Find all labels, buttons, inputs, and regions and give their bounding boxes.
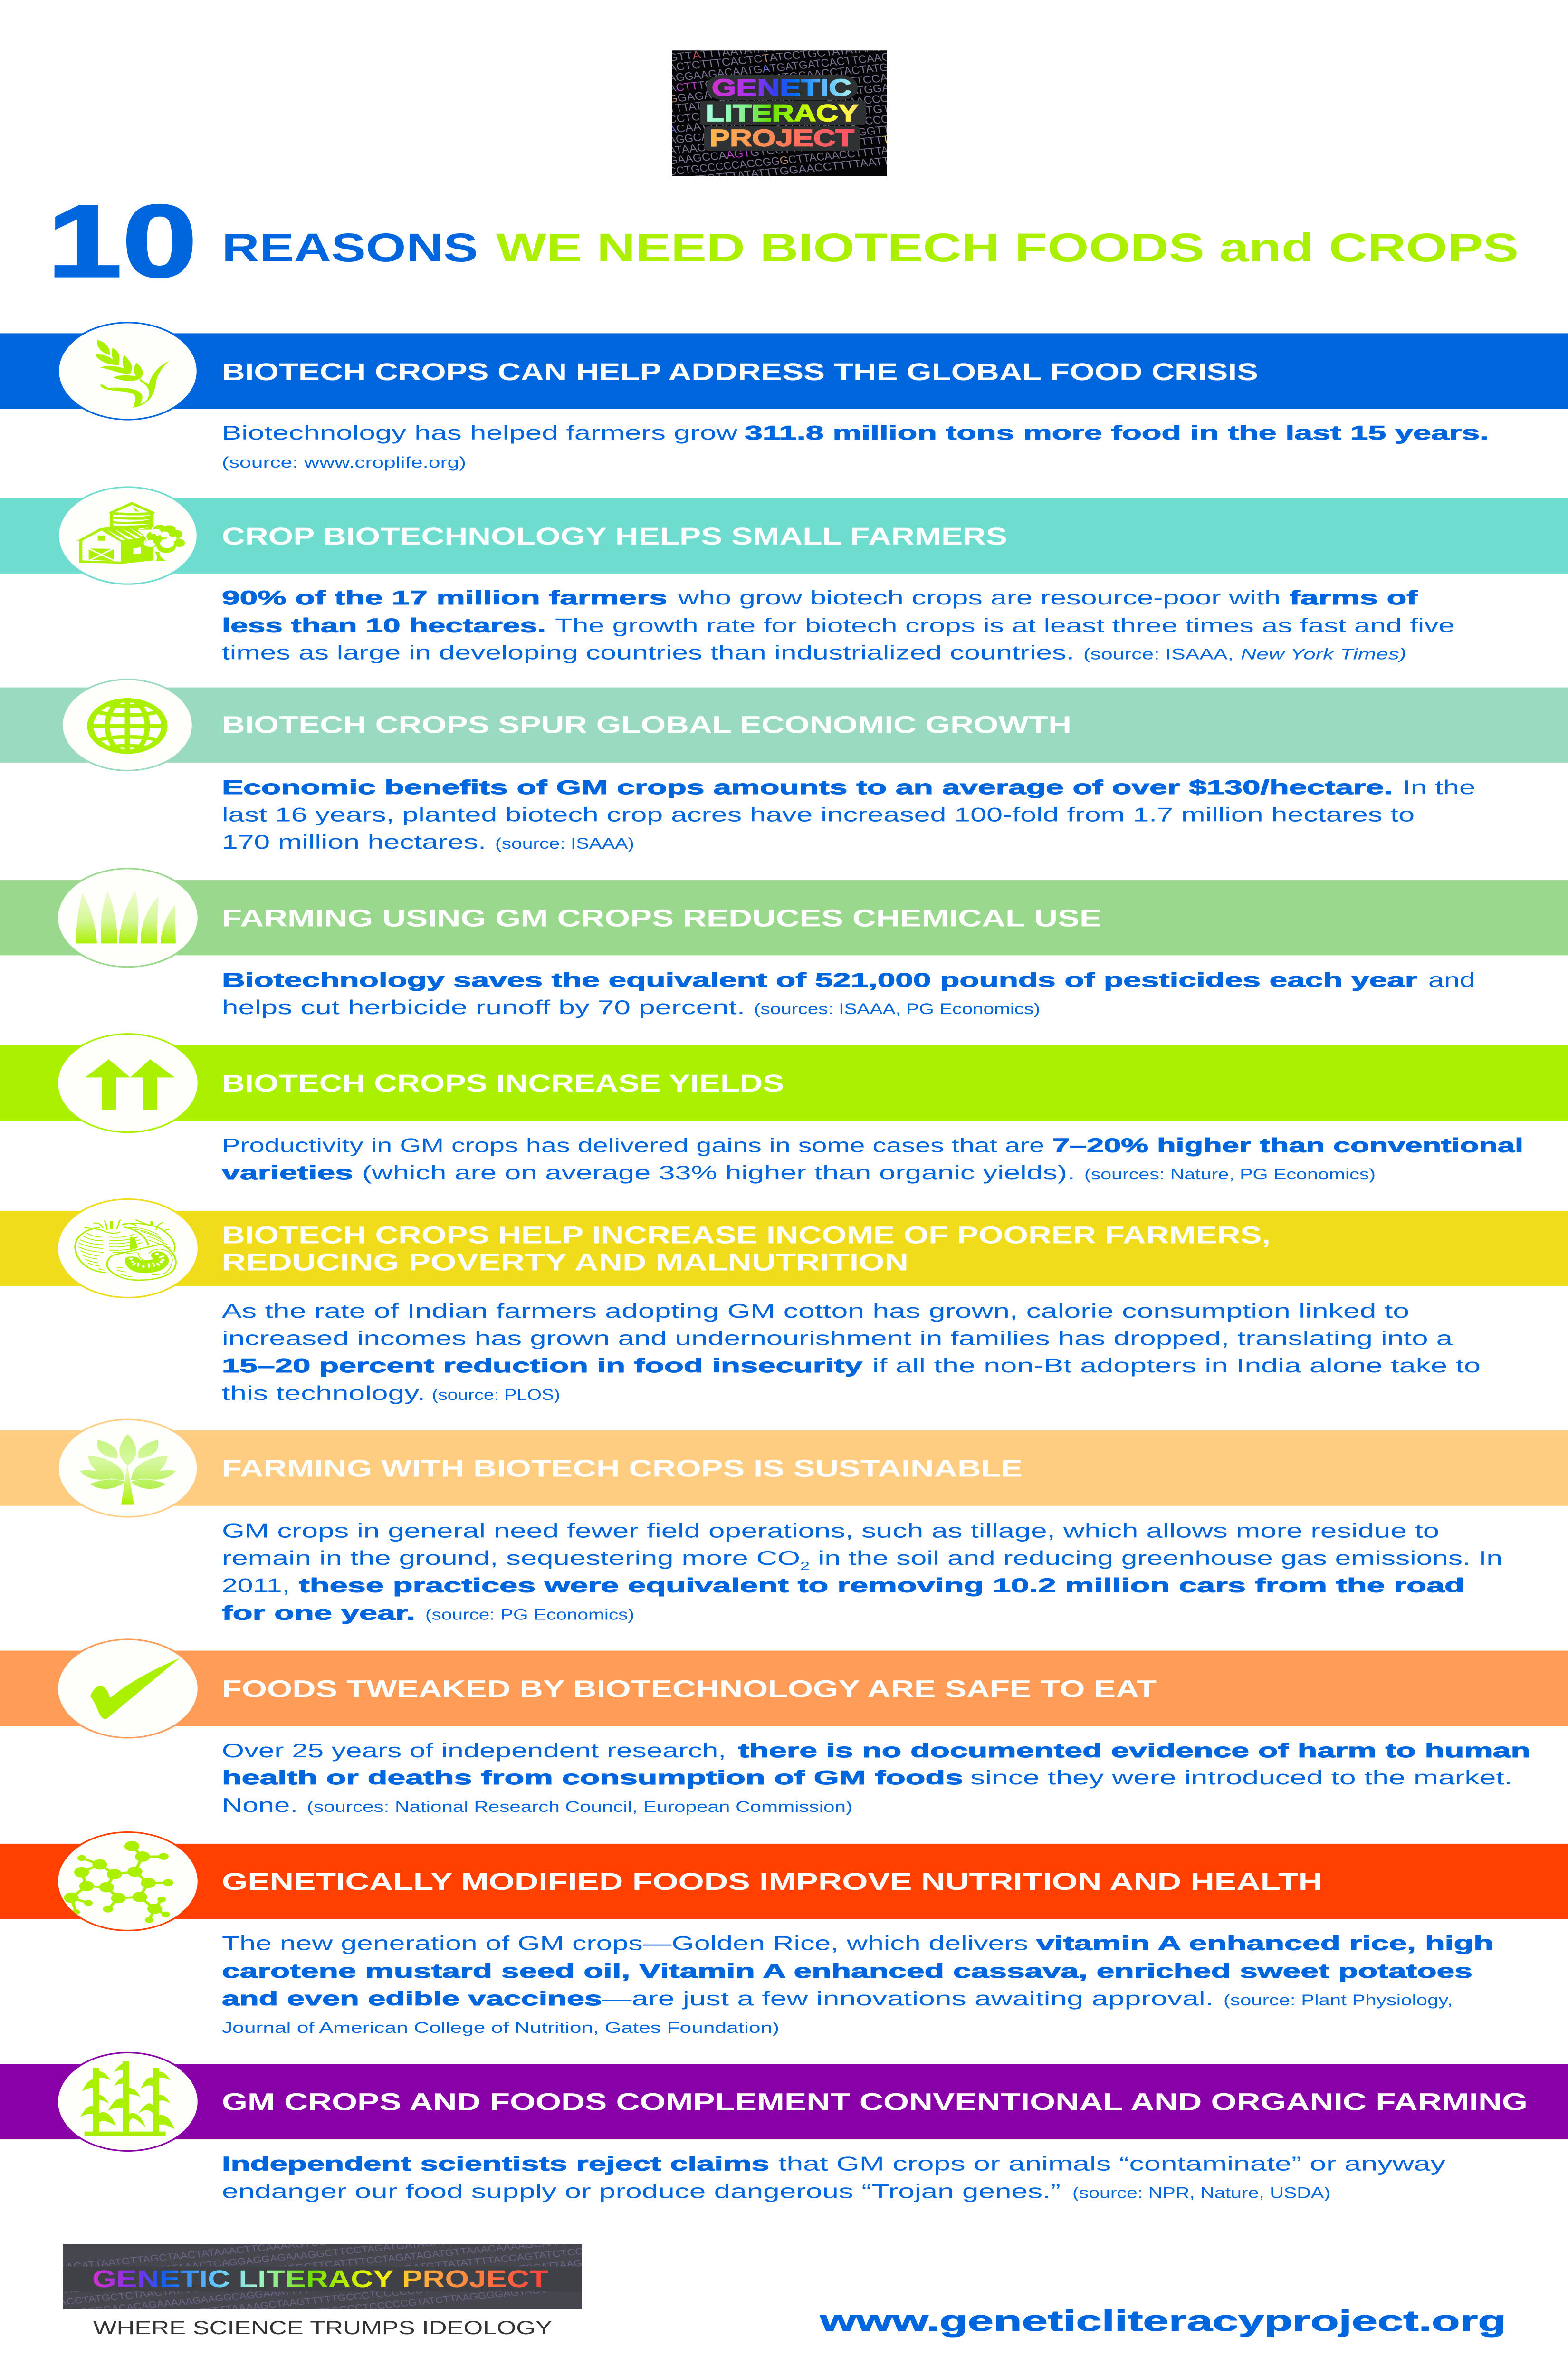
body text: vitamin A enhanced rice, high — [1036, 1932, 1493, 1954]
body text: in the soil and reducing greenhouse gas emissions. In — [818, 1547, 1502, 1569]
logo: Genetic Literacy Project: ACTCTTTCACTCTATCCTGCTATATAAGTA — [667, 39, 899, 74]
icon: grass — [57, 869, 199, 967]
body text — [222, 2152, 1445, 2203]
source — [1083, 646, 1406, 663]
icon: tomatoes — [57, 1199, 199, 1298]
body text: that GM crops or animals “contaminate” or anyway — [778, 2152, 1445, 2175]
body text — [222, 422, 1489, 444]
heading: BIOTECH CROPS HELP INCREASE INCOME OF POORER FARMERS, — [222, 1222, 1271, 1249]
body text: who grow biotech crops are resource-poor with — [678, 586, 1281, 609]
logo: Genetic Literacy Project: PROJECT — [709, 125, 854, 152]
icon: wheat — [58, 323, 198, 420]
body text: Biotechnology saves the equivalent of 521,000 pounds of pesticides each year — [222, 968, 1417, 991]
body text: Independent scientists reject claims — [222, 2152, 769, 2175]
body text: for one year. — [222, 1601, 415, 1624]
source: (source: ISAAA) — [495, 835, 634, 852]
panel: reason 10 — [0, 2052, 1568, 2203]
icon: tree — [58, 1419, 198, 1517]
source — [222, 1992, 1453, 2036]
footer logo banner: AACATTAATGTTAGCTAACTATAAACTTCAAAAGTCCTAGATTAAGGCTTAATGGCAATAACCTTGAAGCTAGGAT — [58, 2209, 615, 2273]
body text: if all the non-Bt adopters in India alone take to — [872, 1354, 1481, 1377]
body text: health or deaths from consumption of GM foods — [222, 1766, 963, 1789]
logo: Genetic Literacy Project: LITERACY — [706, 100, 859, 126]
body text: —are just a few innovations awaiting approval. — [602, 1987, 1214, 2010]
footer logo banner: TAGGCATACAGGAGGAGAAAGTTTAGGTTTATGCTTCATTTTCCTAGATAGATGTTAAACAAAAGCAAAGATTACC — [58, 2232, 615, 2296]
icon: molecule — [57, 1832, 199, 1930]
body text — [222, 1739, 1530, 1816]
footer logo banner: GENETIC LITERACY PROJECT — [92, 2265, 548, 2292]
body text: 2 — [800, 1560, 810, 1573]
banner — [0, 880, 1568, 955]
heading: CROP BIOTECHNOLOGY HELPS SMALL FARMERS — [222, 523, 1007, 550]
title: REASONS — [222, 225, 478, 270]
logo: Genetic Literacy Project: ACAATTGCATTAGCTTACGGCATTATGTT — [667, 102, 898, 136]
banner — [0, 1651, 1568, 1726]
body text: helps cut herbicide runoff by 70 percent. — [222, 996, 745, 1018]
body text: this technology. — [222, 1382, 425, 1404]
body text — [222, 1932, 1493, 2010]
heading: BIOTECH CROPS CAN HELP ADDRESS THE GLOBAL FOOD CRISIS — [222, 359, 1258, 385]
footer logo banner — [63, 2244, 582, 2309]
logo: Genetic Literacy Project: ACTTTCAGGATCACATGCAACCTACTATGG — [667, 60, 898, 95]
heading — [222, 1222, 1271, 1276]
body text: 170 million hectares. — [222, 831, 486, 853]
footer logo banner: ACCTATGCTCTAACTATAAAGGAGAGAAAGGCTTTTATCGTATGATAGATGTTATATTTTACCAGTATCTCCTTGG — [58, 2243, 615, 2308]
footer logo banner: TTCATCAGAAGGCAGGAAATTTTTAAAAGCTAAGTTTTTGCCCTCCCCCGTATCTTAAGGGGAGTAGCAGGAAGTT — [58, 2266, 615, 2331]
logo: Genetic Literacy Project: CAATTGTTTATATTTGGAACCTTTTAATTT — [667, 154, 898, 189]
logo: Genetic Literacy Project: CCTCATTAGGCATTAACGCTAGCTAACCCG — [667, 91, 898, 126]
body text: times as large in developing countries than industrialized countries. — [222, 642, 1074, 663]
source: (source: PG Economics) — [425, 1606, 634, 1623]
body text: increased incomes has grown and undernourishment in families has dropped, translating into a — [222, 1327, 1453, 1349]
panel: reason 3 — [0, 680, 1568, 853]
body text — [222, 1520, 1502, 1624]
source: (source: PLOS) — [432, 1387, 560, 1403]
icon: farm buildings — [58, 487, 198, 584]
panel: reason 7 — [0, 1419, 1568, 1624]
banner — [0, 498, 1568, 574]
icon: corn stalks — [57, 2052, 199, 2151]
title — [47, 183, 1519, 298]
body text: varieties — [222, 1161, 353, 1184]
title: 10 — [47, 183, 197, 298]
logo: Genetic Literacy Project: GGAGATCATTACATGGATTACCTTTCCAG — [667, 71, 898, 105]
body text: 2011, — [222, 1574, 290, 1597]
logo: Genetic Literacy Project: AGGAAGACAATGATGATGATCACTTCAAGT — [667, 50, 898, 85]
source: (source: Plant Physiology, — [1224, 1992, 1453, 2009]
logo: Genetic Literacy Project — [672, 50, 887, 176]
icon: check mark — [57, 1639, 199, 1738]
body text: 7–20% higher than conventional — [1052, 1134, 1523, 1156]
source: (sources: ISAAA, PG Economics) — [754, 1001, 1040, 1017]
body text: there is no documented evidence of harm to human — [738, 1739, 1530, 1762]
body text: The new generation of GM crops—Golden Rice, which delivers — [222, 1932, 1028, 1954]
body text: 15–20 percent reduction in food insecurity — [222, 1354, 862, 1377]
panel: reason 5 — [0, 1034, 1568, 1184]
body text: less than 10 hectares. — [222, 614, 546, 636]
source: (source: www.croplife.org) — [222, 454, 466, 471]
body text — [222, 586, 1454, 663]
body text: Biotechnology has helped farmers grow — [222, 422, 738, 444]
heading: FOODS TWEAKED BY BIOTECHNOLOGY ARE SAFE TO EAT — [222, 1676, 1157, 1703]
body text: since they were introduced to the market. — [970, 1766, 1512, 1789]
heading: FARMING WITH BIOTECH CROPS IS SUSTAINABLE — [222, 1455, 1023, 1482]
logo: Genetic Literacy Project: TTTATCAGGCTTAGCATACCGTAGATGGAA — [667, 81, 899, 115]
heading: BIOTECH CROPS SPUR GLOBAL ECONOMIC GROWTH — [222, 711, 1071, 738]
body text: remain in the ground, sequestering more CO — [222, 1547, 800, 1569]
body text: and — [1428, 968, 1475, 991]
body text: As the rate of Indian farmers adopting GM cotton has grown, calorie consumption linked to — [222, 1300, 1409, 1322]
panel: reason 8 — [0, 1639, 1568, 1816]
heading: BIOTECH CROPS INCREASE YIELDS — [222, 1070, 784, 1097]
body text: endanger our food supply or produce dangerous “Trojan genes.” — [222, 2180, 1061, 2203]
icon: up arrows — [57, 1034, 199, 1132]
logo: Genetic Literacy Project: GENETIC — [712, 75, 851, 101]
heading: FARMING USING GM CROPS REDUCES CHEMICAL USE — [222, 905, 1101, 932]
source: Journal of American College of Nutrition, Gates Foundation) — [222, 2020, 779, 2036]
body text: In the — [1403, 776, 1475, 798]
body text: 90% of the 17 million farmers — [222, 586, 667, 609]
body text — [222, 1300, 1481, 1404]
body text — [222, 776, 1475, 853]
body text: Economic benefits of GM crops amounts to an average of over $130/hectare. — [222, 776, 1393, 798]
body text: farms of — [1290, 586, 1418, 609]
body text: The growth rate for biotech crops is at least three times as fast and five — [555, 614, 1454, 636]
body text: last 16 years, planted biotech crop acres have increased 100-fold from 1.7 million hectares to — [222, 804, 1415, 825]
banner — [0, 1211, 1568, 1286]
website url: www.geneticliteracyproject.org — [820, 2305, 1506, 2338]
heading: GM CROPS AND FOODS COMPLEMENT CONVENTIONAL AND ORGANIC FARMING — [222, 2089, 1528, 2116]
body text: these practices were equivalent to removing 10.2 million cars from the road — [299, 1574, 1464, 1597]
body text: None. — [222, 1794, 298, 1816]
tagline: WHERE SCIENCE TRUMPS IDEOLOGY — [93, 2317, 552, 2338]
heading: REDUCING POVERTY AND MALNUTRITION — [222, 1249, 908, 1276]
source: (source: ISAAA, — [1083, 646, 1233, 663]
body text: carotene mustard seed oil, Vitamin A enhanced cassava, enriched sweet potatoes — [222, 1960, 1472, 1982]
logo: Genetic Literacy Project: GAAGCCAAGTGTCCTTTCGGCAATTTTTA — [667, 133, 899, 167]
source: (sources: Nature, PG Economics) — [1084, 1166, 1376, 1183]
body text: Over 25 years of independent research, — [222, 1739, 726, 1762]
panel: reason 9 — [0, 1832, 1568, 2036]
source: New York Times) — [1241, 646, 1406, 663]
logo: Genetic Literacy Project: GTTATTTAATATAAATACCTAGTTTATCAA — [667, 29, 899, 64]
banner — [0, 1430, 1568, 1506]
source: (sources: National Research Council, European Commission) — [307, 1799, 852, 1815]
body text: (which are on average 33% higher than organic yields). — [362, 1161, 1075, 1184]
logo: Genetic Literacy Project: AGGCATCAGTTACAGATTAGGCTTCCCCCC — [667, 112, 898, 146]
body text: GM crops in general need fewer field operations, such as tillage, which allows more residue to — [222, 1520, 1439, 1542]
icon: globe — [62, 680, 193, 771]
logo: Genetic Literacy Project: CCTGCCCCCACCGGGCTTACAACCTTTTAG — [667, 144, 898, 178]
footer logo banner: TCATCAGAAGGCAGGAAATTTTTAAAAGCTAAGTTTTTGCCCTCCCCCGTATCTTAAGGGGAGTAGCAGGAAGTTT — [58, 2278, 615, 2342]
panel: reason 6 — [0, 1199, 1568, 1404]
panel: reason 1 — [0, 323, 1568, 471]
banner — [0, 1045, 1568, 1121]
banner — [0, 333, 1568, 409]
body text — [222, 1134, 1523, 1184]
source: (source: NPR, Nature, USDA) — [1072, 2184, 1330, 2202]
banner — [0, 2064, 1568, 2139]
panel: reason 4 — [0, 869, 1568, 1018]
banner — [0, 1844, 1568, 1919]
footer logo banner: AAAGTGGACACAGAAAAAGAAGGCAGGAAATTTTTAAAAGCTAGTAGTTTGCCCTCCCCCGTATCCATTAAGGGGA — [58, 2255, 615, 2319]
body text: Productivity in GM crops has delivered gains in some cases that are — [222, 1134, 1044, 1156]
footer logo banner: TTAGTAGCTCTAACTATAAACTCAGGAGGAGAAAGGCTTCCTAGATGATAGATGTTAAACAAAAGCAAAGATTACC — [58, 2220, 615, 2285]
body text: 311.8 million tons more food in the last 15 years. — [745, 422, 1489, 444]
body text — [222, 968, 1475, 1018]
heading: GENETICALLY MODIFIED FOODS IMPROVE NUTRITION AND HEALTH — [222, 1868, 1322, 1895]
body text: and even edible vaccines — [222, 1987, 602, 2010]
logo: Genetic Literacy Project: ATAACGTTCATTGAGCATTACTTTAGGTTT — [667, 123, 898, 157]
panel: reason 2 — [0, 487, 1568, 663]
banner — [0, 688, 1568, 763]
